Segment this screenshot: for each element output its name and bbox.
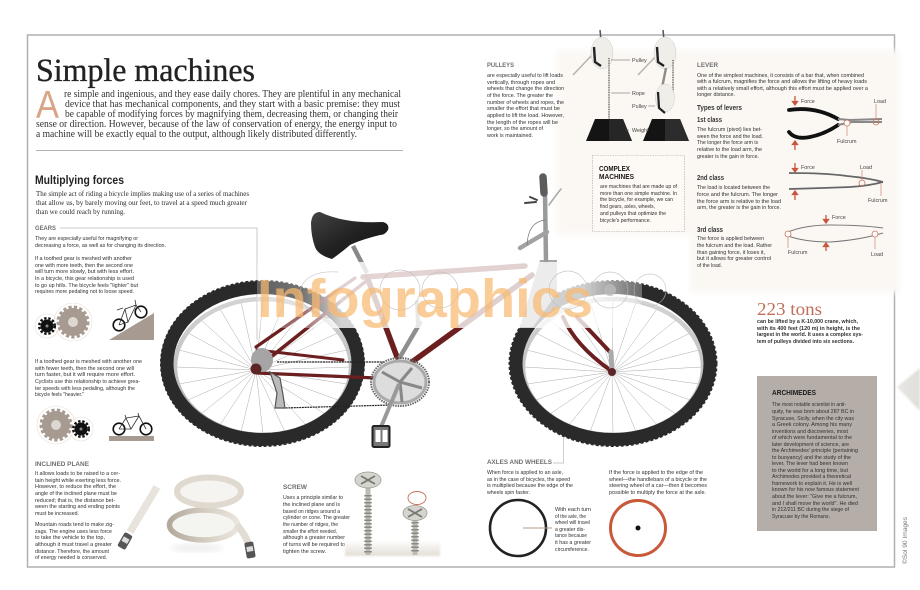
watermark wash (257, 262, 642, 328)
gears text: heavier gearing: If a toothed gear is meshed with another one (35, 359, 142, 365)
head tube and stem (520, 193, 557, 327)
callout: 223 tons: largest in the world. It uses a complex sys- (757, 332, 863, 338)
handlebar and brake lever (525, 177, 561, 245)
panel: Archimedes: a Greek colony. Among his many (772, 422, 852, 428)
gears leader line (60, 228, 257, 340)
third class text: The force is applied between (697, 236, 764, 242)
panel: Archimedes (757, 376, 877, 531)
inclined plane text (34, 471, 121, 561)
panel: Archimedes: about the lever: "Give me a fulcrum, (772, 494, 857, 500)
pulley labels: Pulley (632, 58, 647, 64)
intro text block: sense or direction. However, because of the law of conservation of energy, the energy input to (36, 119, 397, 130)
circumference note: tance because (555, 533, 587, 539)
circumference note: of the axle, the (555, 514, 586, 520)
panel: Archimedes: Archimedes provided a theoretical (772, 474, 851, 480)
panel: Archimedes: to the world for a long time, but (772, 468, 848, 474)
screw text: based on ridges around a (283, 509, 341, 515)
diagram: second class lever nutcracker: Fulcrum (868, 198, 888, 204)
credit: ©Sol 90 Images (902, 517, 909, 564)
panel: Archimedes: in 212/211 BC during the siege of (772, 507, 849, 513)
second class text: 2nd class (697, 173, 724, 182)
third class text: 3rd class (697, 225, 723, 234)
circumference note: circumference. (555, 547, 589, 553)
panel: Archimedes: lever. The lever had been known (772, 461, 848, 467)
illustration: double pulley (638, 30, 689, 141)
callout: complex machines: COMPLEX (599, 166, 630, 173)
inclined plane text: However, to reduce the effort, the (35, 484, 116, 490)
illustration: screws (345, 472, 440, 556)
gears text: lighter gearing: They are especially useful for magnifying or (35, 236, 138, 242)
heading: types of levers: Types of levers (697, 103, 742, 112)
screw text: tighten the screw. (283, 549, 326, 555)
diagram: wheel turned from axle (490, 500, 552, 556)
axles text right: wheel—the handlebars of a bicycle or the (608, 477, 707, 483)
pulleys text: of the force. The greater the (487, 93, 553, 99)
inclined plane text: to take the vehicle to the top, (35, 535, 105, 541)
intro text block: a machine will be exactly equal to the output, although likely distributed differently. (36, 129, 357, 140)
screw text: the inclined plane and is (283, 502, 340, 508)
callout: 223 tons: tem of pulleys divided into six sections. (757, 339, 854, 345)
diagram: first class lever pliers: Load (874, 99, 886, 105)
panel: pulleys (486, 30, 689, 141)
gears text: lighter gearing: will turn more slowly, but with less effort. (34, 269, 134, 275)
heading: pulleys: PULLEYS (487, 62, 515, 69)
pulleys text: longer, so the amount of (487, 126, 543, 132)
rear derailleur and cassette (251, 348, 285, 408)
multiplying forces text: that allow us, by barely moving our feet, to travel at a speed much greater (36, 198, 248, 207)
callout: complex machines (592, 156, 684, 232)
front hub (608, 368, 616, 376)
pulleys text: the length of the ropes will be (487, 120, 558, 126)
intro text block: be capable of modifying forces by magnifying them, decreasing them, or changing their (65, 109, 399, 120)
chain (277, 362, 392, 408)
intro text block: device that has mechanical components, and they start with a basic premise: they must (65, 99, 400, 110)
inclined plane text: must be increased. (35, 511, 79, 517)
intro text block (36, 84, 401, 140)
first class text: 1st class (697, 115, 722, 124)
screw text: Uses a principle similar to (283, 495, 343, 501)
gears text: lighter gearing: In a bicycle, this gear relationship is used (35, 276, 134, 282)
circumference note: wheel will travel (554, 520, 590, 526)
panel: screw (283, 472, 440, 556)
front wheel (510, 282, 716, 446)
inclined plane text: tain height while exerting less force. (35, 478, 121, 484)
multiplying forces text: than we could reach by running. (36, 207, 125, 216)
diagram: first class lever pliers: Fulcrum (837, 139, 857, 145)
panel: Archimedes: to buoyancy) and the study of the (772, 455, 851, 461)
diagram: first class lever pliers: Force (801, 99, 815, 105)
panel: Archimedes: ARCHIMEDES (772, 390, 816, 397)
diagram: third class lever tongs: Force (832, 215, 846, 221)
axles text right (608, 470, 707, 496)
callout: 223 tons: 223 tons (757, 299, 822, 319)
panel: Archimedes: framework to explain it. He is well (772, 481, 852, 487)
gears text: lighter gearing: requires more pedaling not to loose speed. (35, 289, 134, 295)
screw text: the number of ridges, the (283, 522, 338, 528)
icon: bicycle on slope (109, 300, 154, 340)
gears text: lighter gearing: to go up hills. The bicycle feels "lighter" but (35, 283, 138, 289)
seat post (353, 246, 367, 273)
panel: gears (34, 225, 257, 444)
pulley labels: Weight (632, 128, 649, 134)
heading: lever: LEVER (697, 62, 718, 69)
pulleys text (486, 73, 564, 139)
first class text: The longer the force arm is (697, 140, 758, 146)
pulleys text: applied to lift the load. However, (487, 113, 564, 119)
bike frame (256, 266, 532, 378)
lever text: with a relatively small effort, although this effort must be applied over a (696, 86, 869, 92)
panel: inclined plane (34, 461, 256, 561)
second class text: The load is located between the (697, 185, 770, 191)
pulleys text: wheels that change the direction (486, 86, 564, 92)
gears text: lighter gearing (34, 236, 166, 295)
gears text: lighter gearing: If a toothed gear is meshed with another (35, 256, 132, 262)
diagram: wheel turned from edge (610, 500, 666, 556)
illustration: straight steep road (117, 487, 157, 550)
third class text: of the load. (697, 263, 722, 269)
axles text left: When force is applied to an axle, (487, 470, 563, 476)
gears text: heavier gearing: Cyclists use this relationship to achieve grea- (35, 379, 140, 385)
cream background: pulleys and lever (556, 50, 900, 293)
watermark text: Infographics (257, 269, 593, 329)
inclined plane text: Mountain roads tend to make zig- (35, 522, 114, 528)
panel: axles and wheels (486, 437, 707, 556)
diagram: second class lever nutcracker: Load (860, 165, 872, 171)
inclined plane text: ween the starting and ending points (34, 504, 120, 510)
decorative grey shape outside frame (897, 368, 920, 411)
lever text: One of the simplest machines, it consists of a bar that, when combined (697, 73, 864, 79)
gears text: lighter gearing: one with more teeth, then the second one (35, 263, 133, 269)
circumference note: With each turn (555, 507, 591, 513)
gears text: heavier gearing: with fewer teeth, then the second one will (34, 366, 134, 372)
rear wheel (162, 282, 364, 446)
callout: 223 tons (756, 299, 863, 345)
first class text (696, 115, 763, 160)
diagram: third class lever tongs: Load (871, 252, 883, 258)
callout: complex machines: more than one simple machine. In (600, 191, 677, 197)
screw text: smaller the effort needed, (283, 529, 337, 535)
callout: complex machines: MACHINES (599, 174, 634, 181)
callout: complex machines: are machines that are made up of (600, 184, 677, 190)
callout: complex machines: find gears, axles, wheels, (600, 204, 655, 210)
panel: lever (696, 62, 888, 269)
callout: complex machines: bicycle's performance. (600, 218, 651, 224)
screw text (283, 495, 350, 555)
lever text: longer distance. (697, 92, 735, 98)
icon: gears small driving large (35, 303, 92, 341)
panel: Archimedes: the Archimedes' principle (pertaining (772, 448, 858, 454)
panel: Archimedes: The most notable scientist in anti- (772, 402, 846, 408)
crank and pedal (372, 384, 399, 447)
second class text: arm, the greater is the gain in force. (697, 205, 781, 211)
axles text left: is multiplied because the edge of the (487, 483, 573, 489)
heading: multiplying forces: Multiplying forces (35, 175, 124, 187)
axles text left: as in the case of bicycles, the speed (487, 477, 570, 483)
axles text right: If the force is applied to the edge of the (609, 470, 703, 476)
pulleys text: work is maintained. (486, 133, 533, 139)
pulley labels: Rope (632, 91, 645, 97)
heading: axles and wheels: AXLES AND WHEELS (487, 459, 553, 466)
gears text: heavier gearing: ter speeds with less pedaling, although the (35, 386, 135, 392)
inclined plane text: although it must travel a greater (35, 542, 112, 548)
third class text: than gaining force, it loses it, (697, 250, 765, 256)
circumference note (554, 507, 591, 553)
panel: Archimedes: quity, he was born about 287 BC in (772, 409, 854, 415)
pulley labels: Pulley (632, 104, 647, 110)
inclined plane text: distance. Therefore, the amount (35, 549, 109, 555)
lever text: with a fulcrum, magnifies the force and allows the lifting of heavy loads (696, 79, 867, 85)
watermark outline logo (300, 270, 666, 318)
first class text: relative to the load arm, the (697, 147, 762, 153)
first class text: greater is the gain in force. (697, 154, 759, 160)
seat (311, 212, 388, 259)
third class text (697, 225, 772, 269)
illustration: winding road (170, 478, 256, 559)
gears text: lighter gearing: decreasing a force, as well as for changing its direction. (35, 243, 166, 249)
screw text: although a greater number (283, 535, 345, 541)
icon: bicycle on flat ground (109, 413, 154, 441)
axles text left: wheels spin faster. (486, 490, 530, 496)
panel: Archimedes: later development of science, are (772, 442, 849, 448)
diagram: second class lever nutcracker: Force (801, 165, 815, 171)
chainring (371, 358, 429, 406)
screw text: cylinder or cone. The greater (283, 515, 350, 521)
panel: Archimedes: Syracuse, Sicily, when the city was (772, 416, 854, 422)
callout: complex machines: the bicycle, for example, we can (600, 197, 673, 203)
panel: Archimedes: Syracuse by the Romans. (772, 514, 830, 520)
drop cap: A (36, 84, 59, 127)
axles text right: steering wheel of a car—then it becomes (609, 483, 707, 489)
callout: complex machines: and pulleys that optimize the (600, 211, 666, 217)
axles text left (486, 470, 573, 496)
inclined plane text: It allows loads to be raised to a cer- (35, 471, 120, 477)
circumference note: a greater dis- (555, 527, 585, 533)
second class text (697, 173, 781, 211)
screw text: of turns will be required to (283, 542, 345, 548)
third class text: the fulcrum and the load. Rather (697, 243, 772, 249)
first class text: The fulcrum (pivot) lies bet- (697, 127, 762, 133)
circumference note: it has a greater (555, 540, 591, 546)
lever text (696, 73, 869, 98)
illustration: single pulley (573, 30, 632, 141)
callout: 223 tons: can be lifted by a K-10,000 crane, which, (757, 319, 858, 325)
pulleys text: number of wheels and ropes, the (487, 100, 564, 106)
gears text: heavier gearing: turn faster, but it will require more effort. (35, 372, 135, 378)
second class text: the force arm is relative to the load (697, 199, 781, 205)
callout: 223 tons: with its 400 feet (120 m) in height, is the (756, 326, 860, 332)
diagram: second class lever nutcracker (789, 163, 888, 204)
inclined plane text: reduced; that is, the distance bet- (35, 498, 115, 504)
multiplying forces text: The simple act of riding a bicycle implies making use of a series of machines (36, 189, 249, 198)
diagram: third class lever tongs: Fulcrum (788, 250, 808, 256)
title: Simple machines (36, 53, 255, 89)
second class text: force and the fulcrum. The longer (697, 192, 778, 198)
first class text: ween the force and the load. (696, 134, 763, 140)
axles text right: possible to multiply the force at the axle. (609, 490, 706, 496)
heading: gears: GEARS (35, 225, 57, 232)
inclined plane text: of energy needed is conserved. (35, 555, 107, 561)
fork (563, 317, 612, 372)
pulleys text: smaller the effort that must be (487, 106, 560, 112)
panel: Archimedes: of which were fundamental to the (772, 435, 852, 441)
diagram: first class lever pliers (789, 96, 886, 150)
main illustration: bicycle (162, 177, 716, 447)
rear hub (250, 364, 262, 374)
third class text: but it allows for greater control (697, 256, 771, 262)
inclined plane text: zags. The engine uses less force (35, 529, 112, 535)
heading: screw: SCREW (283, 484, 308, 491)
panel: Archimedes: and I shall move the world". He died (772, 501, 858, 507)
inclined plane text: angle of the inclined plane must be (35, 491, 117, 497)
axles leader line (553, 437, 564, 463)
diagram: third class lever tongs (785, 215, 883, 258)
intro text block: re simple and ingenious, and they ease daily chores. They are plentiful in any mechanical (64, 89, 401, 100)
gears text: heavier gearing (34, 359, 142, 398)
panel: Archimedes: inventions and discoveries, most (772, 429, 848, 435)
pulleys text: are especially useful to lift loads (487, 73, 563, 79)
multiplying forces text (36, 189, 249, 216)
gears text: heavier gearing: bicycle feels "heavier." (35, 392, 84, 398)
panel: Archimedes: known for his now famous statement (772, 487, 859, 493)
pulley labels (611, 58, 655, 134)
heading: inclined plane: INCLINED PLANE (35, 461, 90, 468)
icon: gears large driving small (37, 406, 93, 444)
pulleys text: vertically, through ropes and (487, 80, 555, 86)
